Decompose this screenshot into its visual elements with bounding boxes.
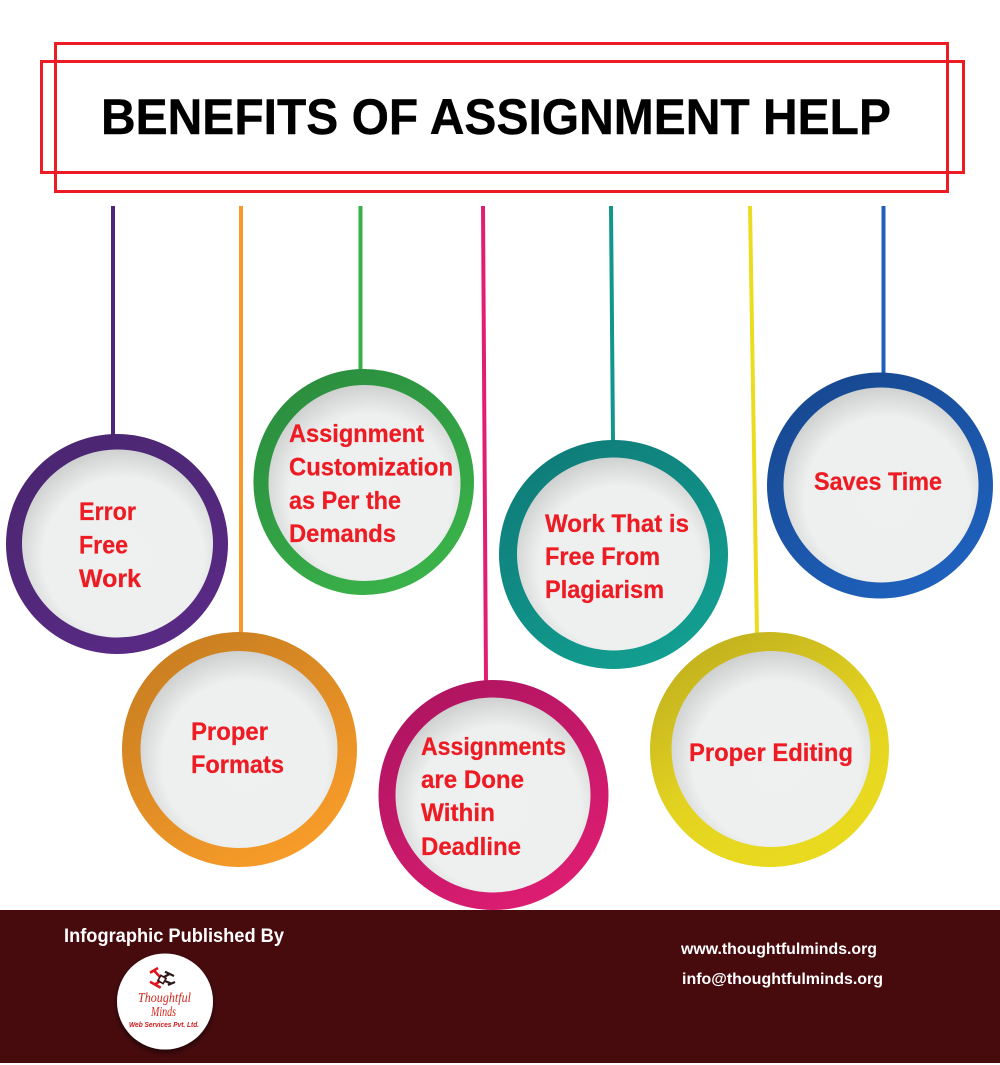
hanging circle: Free From Plagiarism: Work That is bbox=[545, 510, 689, 538]
hanging circle: Error Free Work: Free bbox=[79, 532, 128, 560]
hanging circle: Proper Formats: Formats bbox=[191, 751, 284, 779]
publisher logo: Minds bbox=[150, 1005, 176, 1020]
hanging circle: Proper Editing: Proper Editing bbox=[689, 739, 853, 767]
hanging circle: Proper Editing bbox=[650, 206, 889, 867]
hanging circle: Assignment Customization: as Per the bbox=[289, 487, 401, 515]
hanging circle: Assignment Customization: Demands bbox=[289, 520, 396, 548]
hanging circle: Saves Time bbox=[767, 206, 993, 598]
hanging circle: Free From Plagiarism: Free From bbox=[545, 543, 660, 571]
hanging circle: Proper Formats bbox=[122, 206, 357, 867]
hanging circle: Error Free Work bbox=[6, 206, 228, 654]
publisher logo bbox=[117, 954, 213, 1050]
hanging circle: Assignments Within Deadline: Within bbox=[421, 799, 495, 827]
hanging circle: Assignments Within Deadline: Deadline bbox=[421, 833, 521, 861]
publisher label: Infographic Published By bbox=[64, 926, 284, 947]
publisher logo: Thoughtful bbox=[138, 991, 191, 1006]
hanging circle: Assignments Within Deadline: are Done bbox=[421, 766, 524, 794]
title: BENEFITS OF ASSIGNMENT HELP bbox=[101, 89, 891, 145]
hanging circle: Free From Plagiarism: Plagiarism bbox=[545, 576, 664, 604]
hanging circle: Assignments Within Deadline bbox=[378, 206, 608, 910]
hanging circle: Assignment Customization: Assignment bbox=[289, 420, 425, 448]
publisher logo: Web Services Pvt. Ltd. bbox=[129, 1022, 199, 1029]
logo mark bbox=[150, 968, 175, 988]
title frame bbox=[42, 44, 964, 192]
hanging circle: Saves Time: Saves Time bbox=[814, 468, 942, 496]
hanging circle: Assignments Within Deadline: Assignments bbox=[421, 733, 566, 761]
website: www.thoughtfulminds.org bbox=[680, 941, 877, 958]
hanging circle: Free From Plagiarism bbox=[499, 206, 728, 669]
hanging circle: Error Free Work: Work bbox=[79, 565, 141, 593]
email: info@thoughtfulminds.org bbox=[682, 971, 883, 988]
footer band bbox=[0, 910, 1000, 1063]
hanging circle: Assignment Customization bbox=[253, 206, 474, 595]
hanging circle: Assignment Customization: Customization bbox=[289, 454, 453, 482]
hanging circle: Error Free Work: Error bbox=[79, 498, 136, 526]
hanging circle: Proper Formats: Proper bbox=[191, 718, 268, 746]
